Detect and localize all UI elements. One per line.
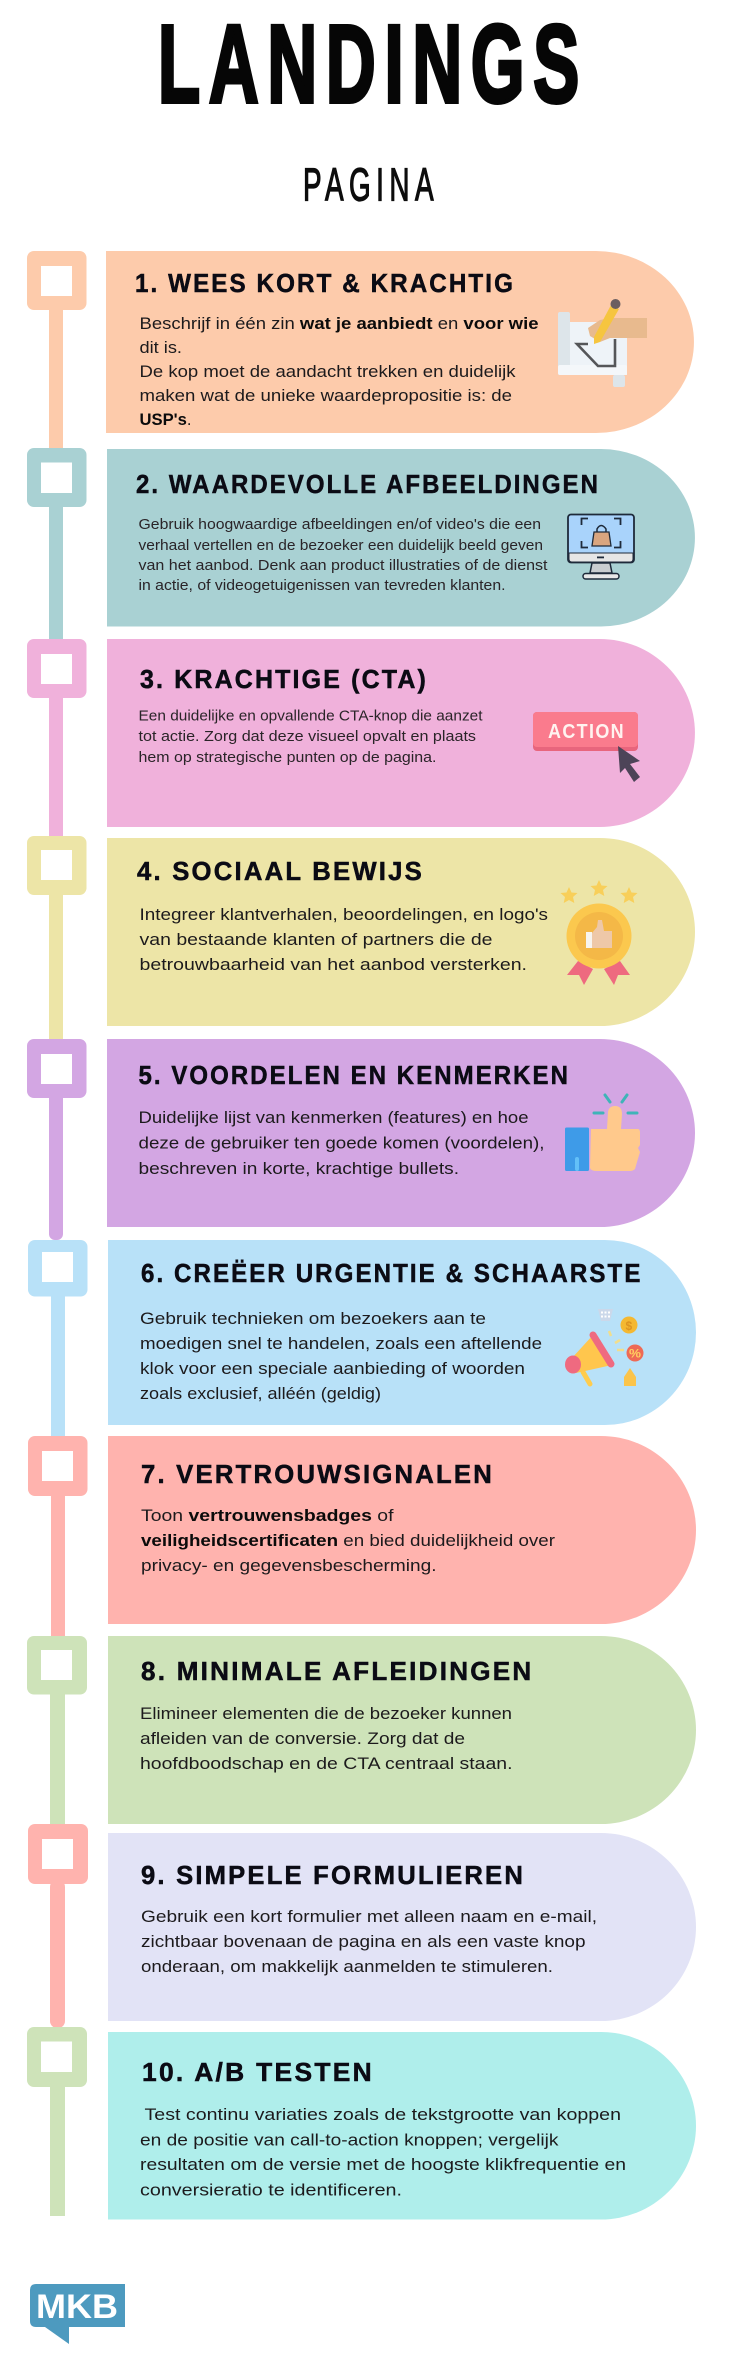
heading 1: 1. WEES KORT & KRACHTIG xyxy=(135,270,515,298)
body text 8 xyxy=(140,1704,512,1773)
heading 7: 7. VERTROUWSIGNALEN xyxy=(141,1461,494,1489)
panel: 7 vertrouwsignalen xyxy=(108,1436,696,1624)
panel: 9 simpele formulieren xyxy=(108,1833,696,2021)
body text 6: zoals exclusief, alléén (geldig) xyxy=(140,1384,381,1403)
logo: MKB speech bubble xyxy=(30,2284,125,2344)
heading 2: 2. WAARDEVOLLE AFBEELDINGEN xyxy=(136,471,600,499)
body text 4: van bestaande klanten of partners die de xyxy=(140,930,492,949)
body text 6: Gebruik technieken om bezoekers aan te xyxy=(140,1309,486,1328)
panel: 10 a/b testen xyxy=(108,2032,696,2220)
panel: 3 krachtige cta xyxy=(107,639,695,827)
heading 5: 5. VOORDELEN EN KENMERKEN xyxy=(138,1062,570,1090)
timeline node 9 xyxy=(28,1824,88,2028)
timeline node 10 xyxy=(27,2027,87,2216)
icon: action button with cursor xyxy=(533,712,640,782)
subtitle: PAGINA xyxy=(303,158,439,210)
body text 2 xyxy=(138,517,548,594)
body text 3: hem op strategische punten op de pagina. xyxy=(138,750,436,766)
timeline node 5 xyxy=(27,1039,86,1240)
body text 3 xyxy=(138,708,482,766)
heading 3: 3. KRACHTIGE (CTA) xyxy=(140,666,428,694)
heading 4: 4. SOCIAAL BEWIJS xyxy=(137,858,424,886)
body text 10: Test continu variaties zoals de tekstgrootte van koppen xyxy=(144,2105,621,2124)
body text 8: Elimineer elementen die de bezoeker kunnen xyxy=(140,1704,512,1723)
body text 10: en de positie van call-to-action knoppen; vergelijk xyxy=(140,2130,559,2150)
body text 10 xyxy=(140,2105,626,2200)
body text 7 xyxy=(141,1506,555,1575)
heading 8: 8. MINIMALE AFLEIDINGEN xyxy=(141,1658,534,1686)
heading 6: 6. CREËER URGENTIE & SCHAARSTE xyxy=(141,1260,642,1288)
body text 9: zichtbaar bovenaan de pagina en als een vaste knop xyxy=(141,1932,586,1951)
body text 4: Integreer klantverhalen, beoordelingen, en logo's xyxy=(140,905,548,924)
body text 1: USP's. xyxy=(140,410,192,429)
timeline node 8 xyxy=(27,1636,87,1826)
panel: 8 minimale afleidingen xyxy=(108,1636,696,1824)
body text 5: deze de gebruiker ten goede komen (voordelen), xyxy=(138,1134,544,1152)
panel: 6 creeer urgentie en schaarste xyxy=(108,1240,696,1425)
icon: medal with stars xyxy=(560,880,638,985)
panel: 2 waardevolle afbeeldingen xyxy=(107,449,695,626)
body text 9: Gebruik een kort formulier met alleen naam en e-mail, xyxy=(141,1907,597,1926)
body text 2: verhaal vertellen en de bezoeker een duidelijk beeld geven xyxy=(138,538,543,554)
heading 9: 9. SIMPELE FORMULIEREN xyxy=(141,1862,525,1890)
icon: megaphone with price tags: $ xyxy=(626,1319,632,1333)
body text 10: resultaten om de versie met de hoogste klikfrequentie en xyxy=(140,2155,626,2174)
icon: monitor with shopping bag xyxy=(568,514,634,579)
icon: thumbs up xyxy=(565,1095,640,1171)
body text 1: maken wat de unieke waardepropositie is: de xyxy=(140,386,512,405)
body text 3: tot actie. Zorg dat deze visueel opvalt en plaats xyxy=(138,729,476,745)
timeline node 4 xyxy=(27,836,86,1040)
body text 10: conversieratio te identificeren. xyxy=(140,2180,402,2200)
body text 5: beschreven in korte, krachtige bullets. xyxy=(138,1159,459,1178)
timeline node 7 xyxy=(28,1436,88,1637)
icon: action button with cursor: ACTION xyxy=(548,721,625,743)
timeline node 1 xyxy=(27,251,86,448)
body text 7: veiligheidscertificaten en bied duidelijkheid over xyxy=(141,1531,555,1550)
timeline node 6 xyxy=(28,1240,88,1437)
body text 8: hoofdboodschap en de CTA centraal staan. xyxy=(140,1754,512,1773)
panel: 5 voordelen en kenmerken xyxy=(107,1039,695,1227)
body text 2: Gebruik hoogwaardige afbeeldingen en/of video's die een xyxy=(138,517,541,533)
body text 2: van het aanbod. Denk aan product illustraties of de dienst xyxy=(138,558,548,574)
body text 1 xyxy=(140,314,538,429)
body text 5: Duidelijke lijst van kenmerken (features) en hoe xyxy=(138,1108,528,1127)
heading 10: 10. A/B TESTEN xyxy=(142,2059,374,2087)
body text 1: Beschrijf in één zin wat je aanbiedt en voor wie xyxy=(140,314,538,333)
body text 9: onderaan, om makkelijk aanmelden te stimuleren. xyxy=(141,1957,553,1976)
timeline node 3 xyxy=(27,639,86,836)
body text 6: klok voor een speciale aanbieding of woorden xyxy=(140,1359,525,1378)
body text 8: afleiden van de conversie. Zorg dat de xyxy=(140,1729,465,1748)
logo: MKB speech bubble: MKB xyxy=(36,2288,118,2326)
body text 9 xyxy=(141,1907,597,1976)
body text 1: De kop moet de aandacht trekken en duidelijk xyxy=(140,362,516,381)
body text 6: moedigen snel te handelen, zoals een aftellende xyxy=(140,1334,542,1353)
timeline node 2 xyxy=(27,448,86,640)
icon: megaphone with price tags xyxy=(565,1309,644,1386)
body text 5 xyxy=(138,1108,544,1178)
body text 3: Een duidelijke en opvallende CTA-knop die aanzet xyxy=(138,708,482,724)
body text 2: in actie, of videogetuigenissen van tevreden klanten. xyxy=(138,578,506,594)
body text 7: privacy- en gegevensbescherming. xyxy=(141,1556,436,1575)
body text 4 xyxy=(140,905,548,974)
icon: megaphone with price tags: % xyxy=(629,1346,641,1360)
body text 6 xyxy=(140,1309,542,1403)
body text 4: betrouwbaarheid van het aanbod versterken. xyxy=(140,955,527,974)
icon: drawing hand on paper xyxy=(558,299,647,387)
panel: 1 wees kort en krachtig xyxy=(106,251,694,433)
body text 1: dit is. xyxy=(140,338,182,357)
panel: 4 sociaal bewijs xyxy=(107,838,695,1026)
body text 7: Toon vertrouwensbadges of xyxy=(141,1506,394,1525)
